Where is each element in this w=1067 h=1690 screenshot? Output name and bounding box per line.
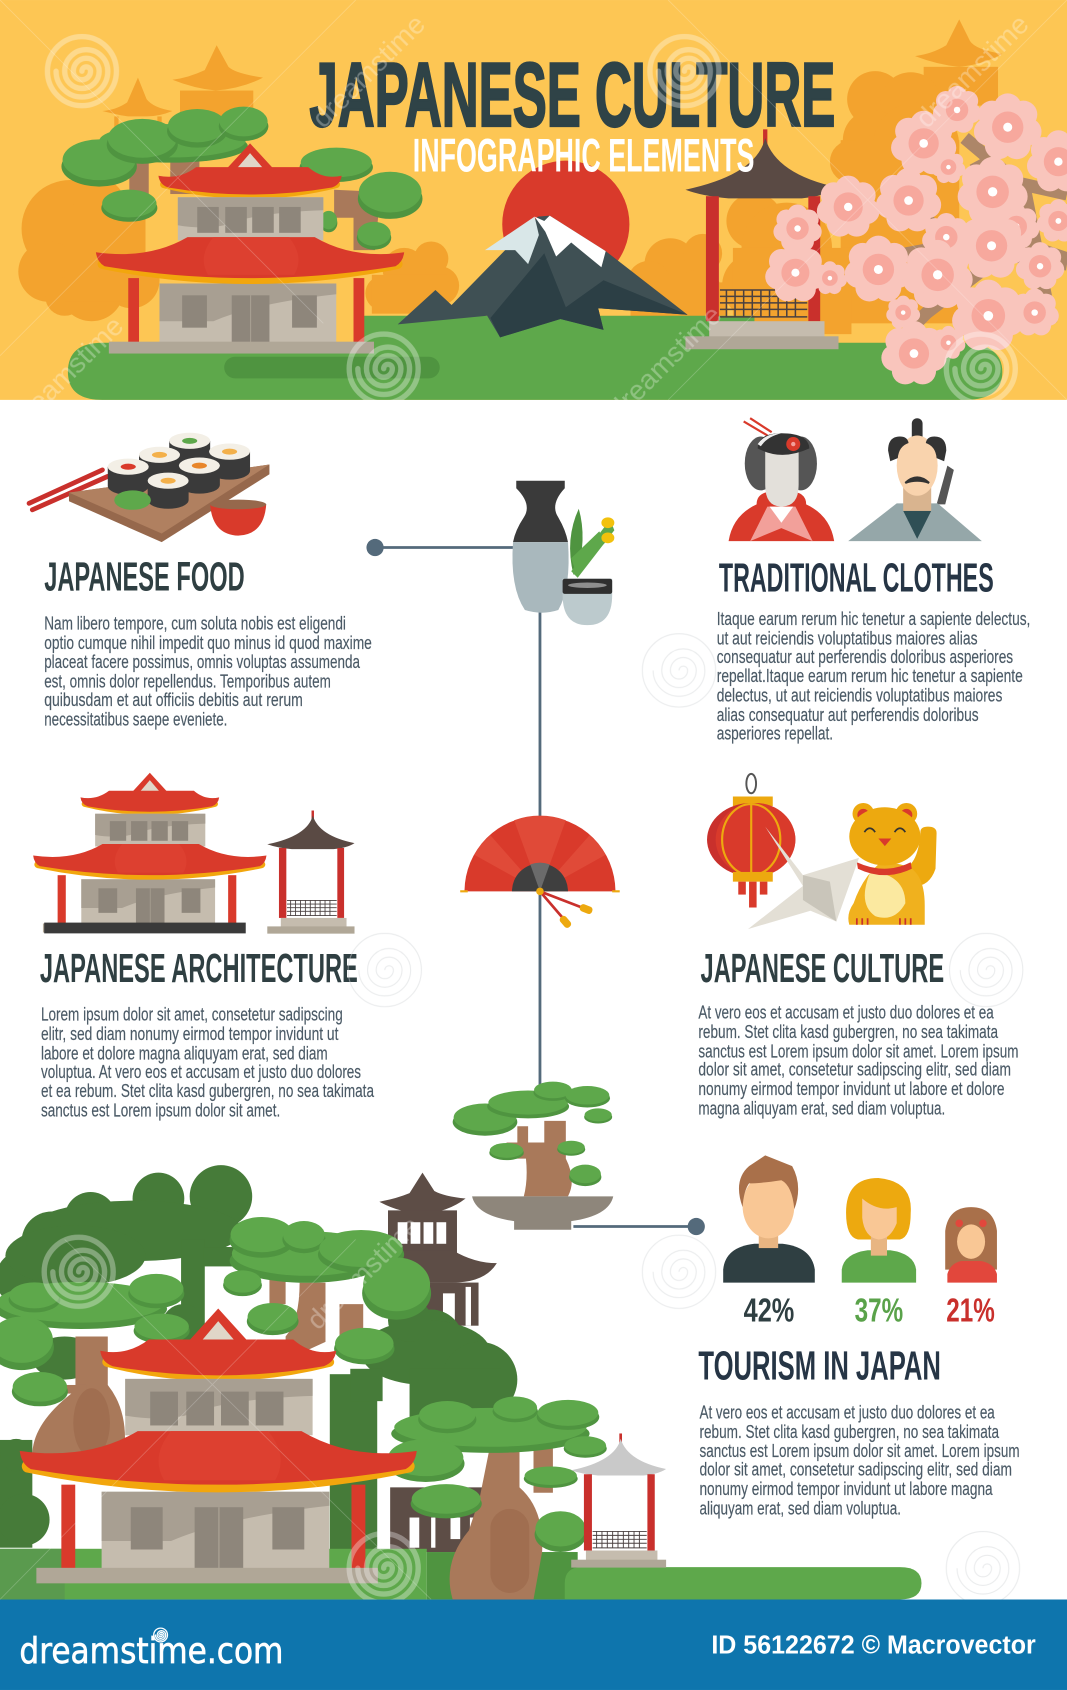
panel: japanese food <box>29 433 372 729</box>
text block: labore et dolore magna aliquyam erat, sed diam <box>41 1042 328 1063</box>
background pagoda <box>377 1173 497 1552</box>
text block: Lorem ipsum dolor sit amet, consetetur sadipscing <box>41 1004 343 1025</box>
green ground <box>68 316 1002 400</box>
ground <box>0 1549 922 1599</box>
watermark overlay: dreamstime <box>4 310 129 435</box>
icon: origami crane <box>748 827 859 929</box>
panel: traditional clothes <box>717 418 1030 743</box>
text block: placeat facere possimus, omnis voluptas assumenda <box>44 651 361 672</box>
footer background <box>0 1599 1067 1690</box>
panel: japanese architecture <box>33 773 375 1121</box>
text block <box>44 612 372 729</box>
heading: JAPANESE FOOD <box>44 554 245 600</box>
timeline connector <box>366 539 705 1235</box>
panel: tourism in japan <box>698 1155 1020 1518</box>
text block: et ea rebum. Stet clita kasd gubergren, no sea takimata <box>41 1080 375 1101</box>
icon: geisha <box>729 418 834 541</box>
text block: aliquyam erat, sed diam voluptua. <box>699 1497 901 1518</box>
left and right pine foliage <box>61 107 422 250</box>
dark green trees <box>0 1165 517 1557</box>
text block: asperiores repellat. <box>717 722 833 743</box>
bottom gazebo <box>571 1433 666 1568</box>
panel: bottom landscape <box>0 1165 921 1599</box>
icon: paper lantern <box>707 774 795 908</box>
text block: elitr, sed diam nonumy eirmod tempor invidunt ut <box>41 1023 338 1044</box>
text block: est, omnis dolor repellendus. Temporibus autem <box>44 671 331 692</box>
header background <box>0 0 1067 400</box>
text block: sanctus est Lorem ipsum dolor sit amet. <box>41 1100 280 1121</box>
watermark overlay: dreamstime <box>306 8 431 134</box>
icon: samurai <box>848 418 982 541</box>
header gazebo <box>685 129 839 349</box>
text block: alias consequatur aut perferendis doloribus <box>717 704 979 725</box>
icon: pagoda <box>33 773 266 933</box>
ground bar <box>44 923 246 933</box>
icon: folding fan <box>460 816 620 929</box>
panel: header banner <box>0 0 1067 400</box>
icon: sake set <box>512 481 614 625</box>
text block <box>717 608 1030 743</box>
icon: maneki-neko cat <box>848 803 937 925</box>
stat: 42 percent: 42% <box>744 1292 794 1329</box>
icon: woman <box>842 1178 916 1283</box>
pagoda windows <box>398 1222 475 1548</box>
stat: 21 percent: 21% <box>946 1292 995 1329</box>
text block: optio cumque nihil impedit quo minus id quod maxime <box>44 632 372 653</box>
orange background silhouettes <box>18 19 1002 334</box>
red sun <box>502 161 629 288</box>
cherry blossoms <box>765 86 1067 384</box>
text block: magna aliquyam erat, sed diam voluptua. <box>698 1097 945 1118</box>
heading: JAPANESE ARCHITECTURE <box>40 945 358 991</box>
text block <box>41 1004 375 1121</box>
icon: bonsai <box>453 1082 613 1230</box>
subtitle: INFOGRAPHIC ELEMENTS <box>413 129 754 182</box>
stat: 37 percent: 37% <box>855 1292 903 1329</box>
panel: japanese culture <box>698 774 1018 1118</box>
text block: Nam libero tempore, cum soluta nobis est eligendi <box>44 612 346 633</box>
icon: girl <box>945 1207 997 1283</box>
watermark overlay: dreamstime <box>909 8 1035 134</box>
text block <box>698 1002 1018 1118</box>
bottom pagoda <box>20 1308 417 1583</box>
icon: man <box>723 1155 815 1283</box>
cherry branches <box>851 138 1067 345</box>
tree trunks <box>22 1272 553 1599</box>
text block <box>699 1401 1020 1518</box>
left tree trunks <box>129 151 380 250</box>
footer credit: ID 56122672 © Macrovector <box>711 1631 1036 1659</box>
pine foliage <box>0 1217 607 1552</box>
text block: quibusdam et aut officiis debitis aut rerum <box>44 689 303 710</box>
watermark overlay: dreamstime <box>602 299 727 425</box>
header pagoda <box>96 143 404 354</box>
icon: sushi board <box>29 433 269 542</box>
icon: footer swirl <box>154 1628 167 1642</box>
watermark overlay: dreamstime <box>300 1210 426 1335</box>
text block: voluptua. At vero eos et accusam et justo duo dolores <box>41 1061 361 1082</box>
text block: necessitatibus saepe eveniete. <box>44 708 227 729</box>
tree trunk shade <box>73 1388 529 1593</box>
footer bar <box>0 1599 1067 1690</box>
text block: ut aut reiciendis voluptatibus maiores alias <box>717 628 978 649</box>
mount fuji <box>398 216 688 337</box>
footer logo text: dreamstime.com <box>19 1631 283 1672</box>
icon: gazebo <box>267 811 355 934</box>
